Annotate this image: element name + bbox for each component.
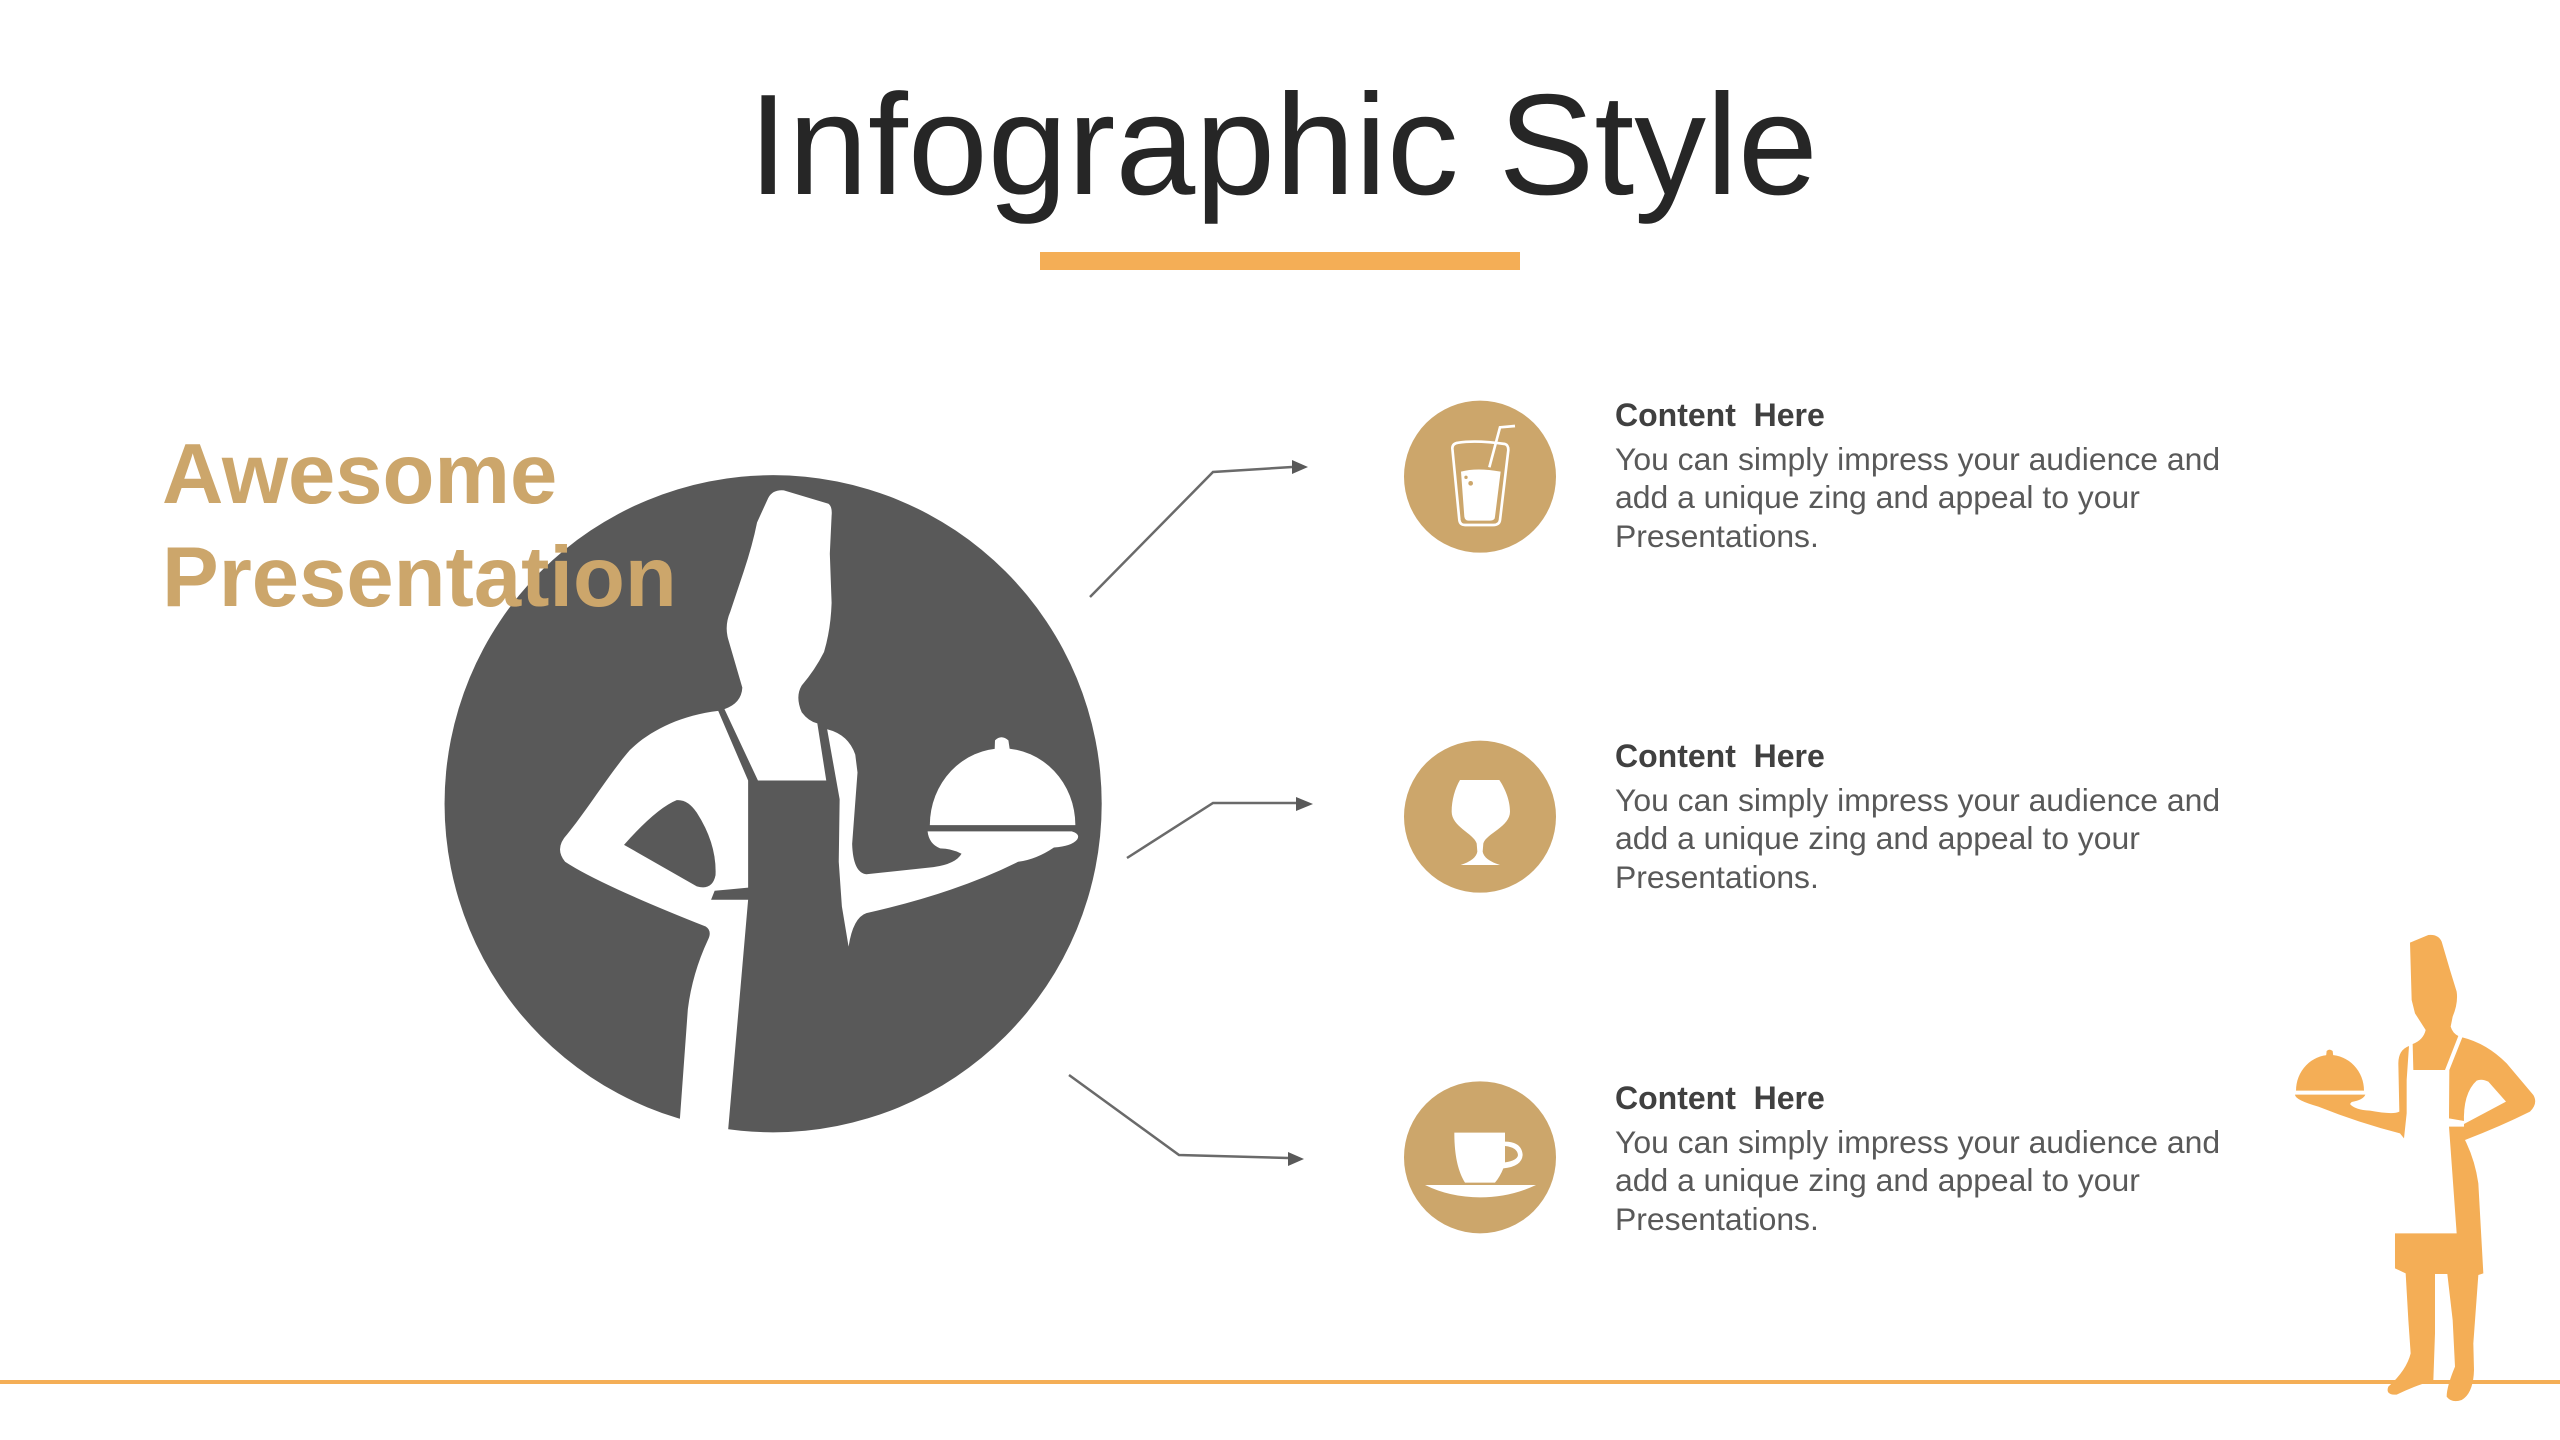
text: third content block: add a unique zing and appeal to your (1615, 1162, 2140, 1198)
icon: coffee cup (1404, 1081, 1556, 1233)
text: first content block: Presentations. (1615, 518, 1819, 554)
text: third content block: Presentations. (1615, 1201, 1819, 1237)
text: first content block (1615, 397, 2220, 554)
icon: standing orange chef (2295, 935, 2535, 1401)
text: first content block: Content Here (1615, 397, 1825, 433)
title underline (1040, 252, 1520, 270)
icon: chef in dark circle (445, 475, 1102, 1143)
text: second content block: You can simply impress your audience and (1615, 782, 2220, 818)
heading: Awesome Presentation (162, 427, 677, 625)
text: first content block: You can simply impress your audience and (1615, 441, 2220, 477)
arrow: top connector (1090, 460, 1308, 597)
text: first content block: add a unique zing and appeal to your (1615, 479, 2140, 515)
title: Infographic Style (748, 65, 1818, 225)
text: third content block (1615, 1080, 2220, 1237)
text: third content block: Content Here (1615, 1080, 1825, 1116)
heading: Awesome Presentation: Awesome (162, 427, 557, 522)
heading: Awesome Presentation: Presentation (162, 530, 677, 625)
arrow: middle connector (1127, 797, 1313, 858)
text: second content block: Presentations. (1615, 859, 1819, 895)
text: third content block: You can simply impress your audience and (1615, 1124, 2220, 1160)
text: second content block: add a unique zing and appeal to your (1615, 820, 2140, 856)
text: second content block (1615, 738, 2220, 895)
arrow: bottom connector (1069, 1075, 1304, 1166)
icon: brandy glass (1404, 741, 1556, 893)
floor line (0, 1380, 2560, 1384)
icon: juice glass (1404, 401, 1556, 553)
text: second content block: Content Here (1615, 738, 1825, 774)
